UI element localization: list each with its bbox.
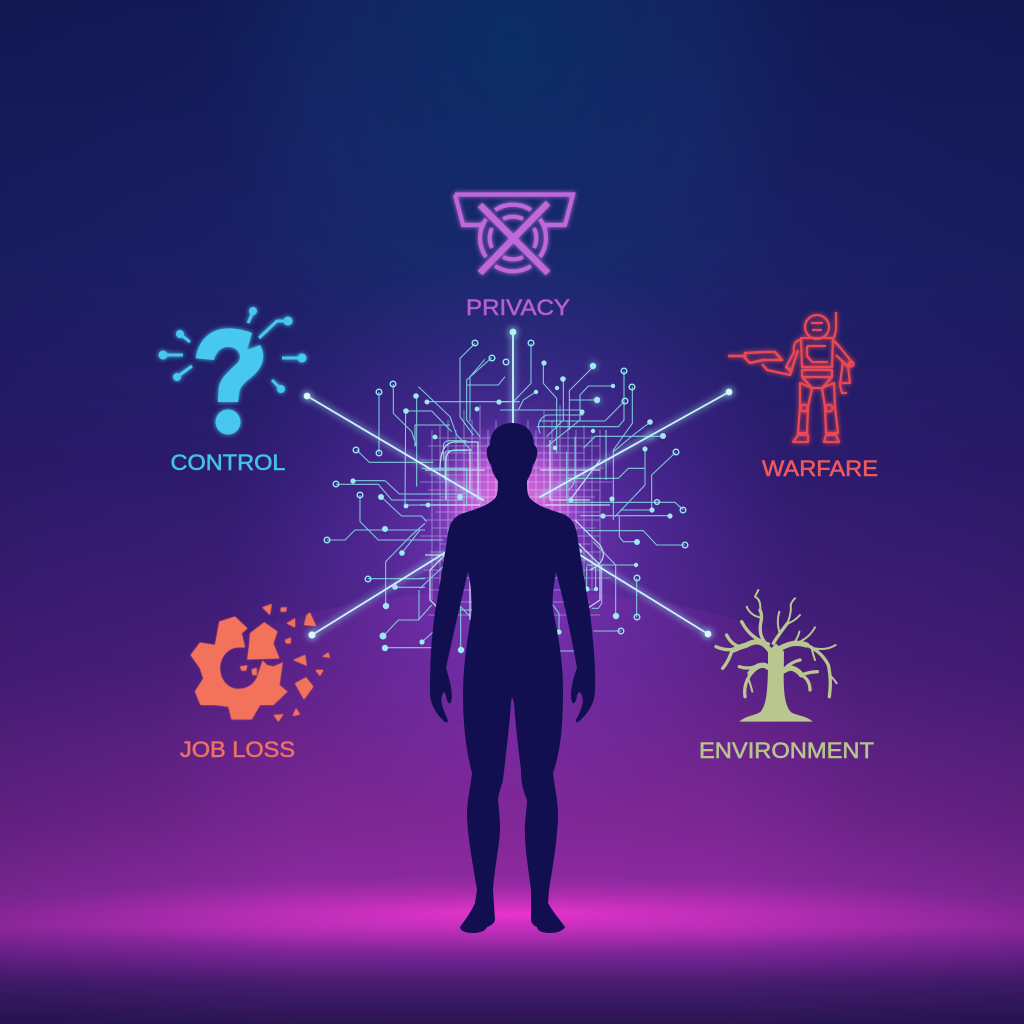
icon: environment dead tree [716, 590, 837, 722]
hollow nodes [324, 340, 688, 639]
icon: control question mark [158, 307, 306, 434]
label: job loss: JOB LOSS [180, 737, 295, 762]
human silhouette [430, 423, 595, 933]
icon: privacy [455, 194, 573, 273]
bright spokes [307, 332, 729, 635]
label: control: CONTROL [170, 450, 286, 475]
label: warfare: WARFARE [762, 456, 878, 481]
right traces [500, 343, 685, 651]
dense central mesh [420, 405, 612, 615]
icon: warfare robot soldier [728, 312, 854, 442]
node dots [301, 326, 735, 653]
label: environment: ENVIRONMENT [699, 738, 874, 763]
icon: job loss broken gear [191, 604, 330, 722]
circuit network [301, 326, 735, 653]
left traces [327, 343, 510, 650]
label: privacy: PRIVACY [466, 295, 570, 320]
